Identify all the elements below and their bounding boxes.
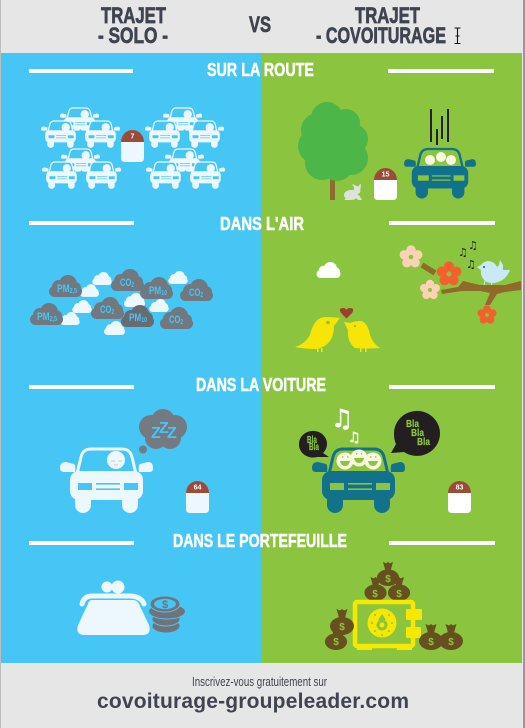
header: trajet solo: - SOLO - <box>98 23 168 48</box>
illustration: pollution clouds: 2 <box>131 282 134 289</box>
illustration: pollution clouds: PM <box>37 311 54 323</box>
icon: milestone 7 <box>121 130 144 162</box>
icon: large speech bubble: Bla <box>411 428 424 439</box>
icon: bird song notes: ♫ <box>468 239 478 252</box>
illustration: pollution clouds: CO <box>120 277 136 289</box>
icon: clean white cloud <box>316 262 340 278</box>
icon: music notes <box>331 404 361 446</box>
icon: exhaust lines <box>430 109 449 145</box>
header: trajet solo: TRAJET <box>101 3 166 28</box>
illustration: money bags left of safe: $ <box>339 622 345 633</box>
icon: yellow bird right <box>344 321 380 352</box>
panel: carpool (green) <box>261 53 522 663</box>
panel: solo (blue) <box>1 53 261 663</box>
icon: milestone 64 <box>186 481 209 513</box>
icon: milestone 15 <box>374 168 397 200</box>
header: trajet solo <box>98 3 168 48</box>
icon: milestone 83: 83 <box>456 484 463 492</box>
icon: coin stack: $ <box>162 599 168 611</box>
illustration: pollution clouds: 2,5 <box>70 288 77 295</box>
illustration: pollution clouds <box>30 269 213 329</box>
icon: small speech bubble <box>299 431 329 458</box>
illustration: pollution clouds: 10 <box>161 290 167 297</box>
footer: sign-up invitation: Inscrivez-vous gratuitement sur <box>192 674 327 689</box>
icon: carpool car with happy passengers <box>312 449 405 513</box>
icon: thought bubble with zzz: Z <box>159 420 169 437</box>
icon: milestone 64: 64 <box>194 484 201 492</box>
icon: blue bird <box>477 260 510 285</box>
illustration: pollution clouds: PM <box>149 285 166 297</box>
illustration: money bags above safe <box>364 562 410 601</box>
icon: milestone 15: 15 <box>382 172 389 178</box>
icon: bird song notes: ♫ <box>458 246 468 259</box>
section heading: sur la route: SUR LA ROUTE <box>207 60 314 80</box>
icon: coin stack <box>148 596 186 633</box>
icon: thought bubble with zzz: Z <box>151 425 161 442</box>
header: trajet covoiturage: - COVOITURAGE <box>316 23 446 48</box>
footer: website url: covoiturage-groupeleader.com <box>97 690 409 713</box>
header: trajet covoiturage <box>316 3 446 48</box>
icon: rabbit <box>344 184 362 200</box>
icon: music notes: ♫ <box>348 430 361 446</box>
icon: yellow safe <box>355 602 422 650</box>
icon: milestone 83 <box>448 481 471 513</box>
illustration: money bags right of safe: $ <box>448 637 454 648</box>
icon: tree <box>298 102 368 200</box>
icon: small speech bubble: Bla <box>307 435 317 446</box>
illustration: money bags above safe: $ <box>396 589 402 600</box>
icon: purse <box>77 580 150 635</box>
illustration: flowering branch <box>400 245 521 324</box>
icon: large speech bubble: Bla <box>417 437 430 448</box>
header: versus: VS <box>249 12 271 37</box>
icon: bird song notes <box>458 239 478 271</box>
illustration: money bags left of safe: $ <box>333 637 339 648</box>
icon: bird song notes: ♫ <box>466 258 476 271</box>
illustration: pollution clouds: PM <box>57 283 74 295</box>
icon: yellow bird left <box>295 317 340 352</box>
illustration: pollution clouds: CO <box>189 287 206 299</box>
illustration: white clouds <box>60 271 188 335</box>
illustration: pollution clouds: 10 <box>141 317 147 324</box>
illustration: money bags above safe: $ <box>372 589 378 600</box>
illustration: money bags right of safe <box>419 624 463 650</box>
illustration: pollution clouds: 2,5 <box>50 316 57 323</box>
icon: carpool car on road <box>404 149 476 199</box>
icon: text cursor <box>454 28 460 44</box>
icon: milestone 7: 7 <box>131 134 135 140</box>
icon: music notes: ♫ <box>331 404 353 433</box>
illustration: money bags left of safe <box>325 609 354 650</box>
illustration: pollution clouds: CO <box>100 304 116 316</box>
illustration: traffic jam of solo cars <box>41 108 225 189</box>
icon: thought bubble with zzz: Z <box>167 425 177 442</box>
illustration: pollution clouds: 2 <box>111 309 114 316</box>
illustration: pollution clouds: 2 <box>200 292 203 299</box>
icon: solo car with sleeping driver <box>60 449 153 513</box>
icon: thought bubble with zzz <box>139 409 187 454</box>
header: trajet covoiturage: TRAJET <box>355 3 420 28</box>
illustration: pollution clouds: PM <box>129 312 146 324</box>
illustration: pollution clouds: CO <box>169 314 186 326</box>
icon: small speech bubble: Bla <box>309 442 319 453</box>
section heading: dans la voiture: DANS LA VOITURE <box>196 375 326 395</box>
illustration: pollution clouds: 2 <box>180 319 183 326</box>
icon: heart <box>340 308 353 318</box>
icon: large speech bubble <box>391 411 440 456</box>
section heading: dans l'air: DANS L'AIR <box>220 214 304 234</box>
section heading: dans le portefeuille: DANS LE PORTEFEUILLE <box>173 531 347 551</box>
illustration: money bags right of safe: $ <box>428 637 434 648</box>
illustration: money bags above safe: $ <box>385 574 391 585</box>
icon: large speech bubble: Bla <box>406 419 419 430</box>
